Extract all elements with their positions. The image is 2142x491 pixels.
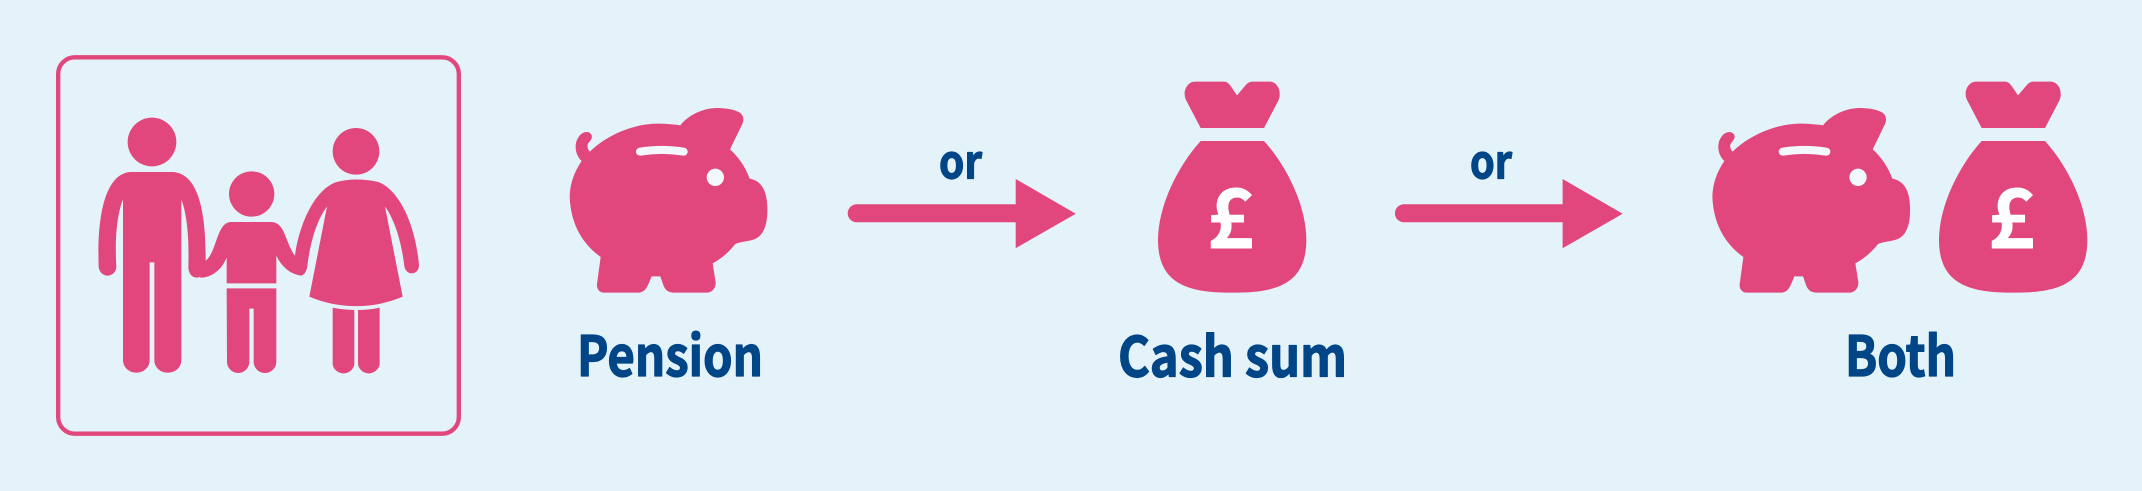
icon: money bag: [1158, 82, 1306, 293]
frame border: [58, 57, 459, 434]
icon: money bag: £: [1206, 151, 1255, 272]
label: Pension: Pension: [577, 312, 763, 392]
icon: money bag (both): £: [1987, 151, 2036, 272]
arrow: pension to cash sum: [848, 179, 1076, 248]
icon: woman: [295, 128, 419, 373]
icon: money bag (both): [1939, 82, 2087, 293]
label: Both: Both: [1845, 312, 1956, 392]
icon: man: [98, 118, 206, 373]
arrow: cash sum to both: [1395, 179, 1623, 248]
label: Cash sum: Cash sum: [1118, 312, 1347, 392]
icon: child: [200, 171, 302, 373]
icon: piggy bank: [570, 108, 767, 293]
label: or: or: [939, 126, 983, 192]
icon: piggy bank (both): [1712, 108, 1910, 293]
panel: family frame: [58, 57, 459, 434]
label: or: or: [1470, 126, 1513, 192]
